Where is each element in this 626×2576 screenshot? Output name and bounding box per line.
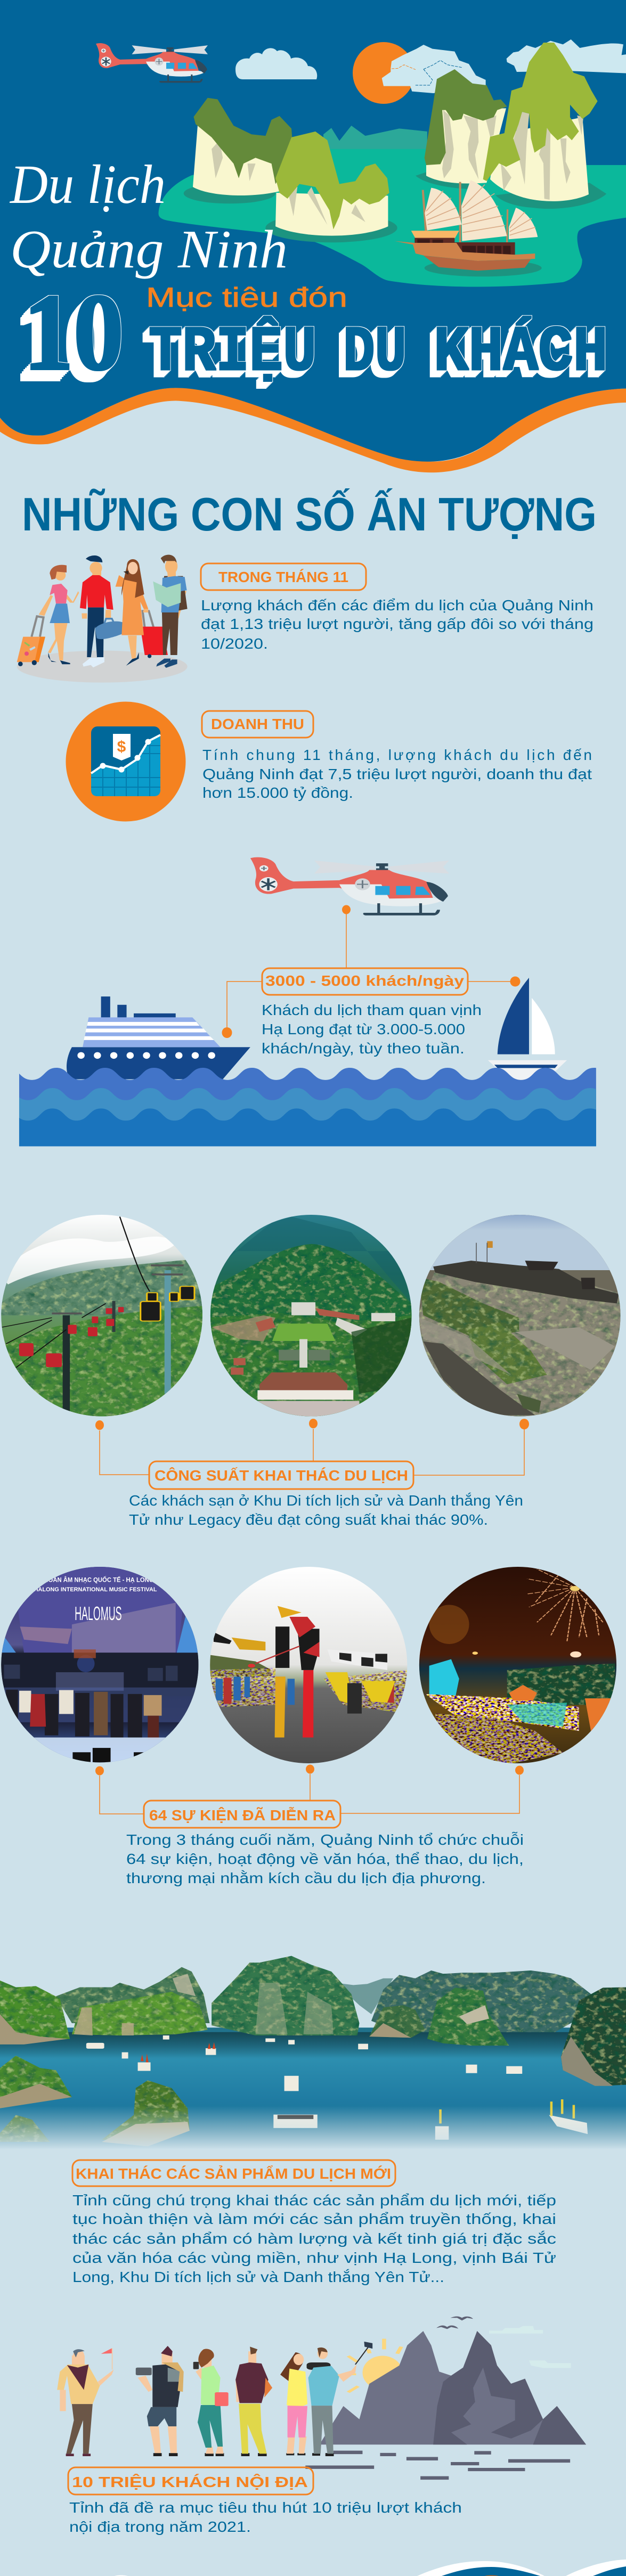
tag: khách/ngày: 3000 - 5000 khách/ngày (265, 972, 465, 989)
text: khách/ngày: Khách du lịch tham quan vịnh (262, 1002, 482, 1018)
tag: 64 sự kiện: 64 SỰ KIỆN ĐÃ DIỄN RA (149, 1807, 336, 1823)
clouds and sun overlap (382, 45, 486, 93)
title: triệu du khách: KHÁCH (434, 316, 608, 389)
photo: music festival: HOÀN ÂM NHẠC QUỐC TẾ - HẠ LONG (44, 1576, 154, 1583)
rocks right (395, 43, 606, 276)
text: sản phẩm mới: Tỉnh cũng chú trọng khai thác các sản phẩm du lịch mới, tiếp (72, 2192, 556, 2209)
text: sản phẩm mới: Long, Khu Di tích lịch sử và Danh thắng Yên Tử... (72, 2269, 444, 2285)
panel: transport scene (19, 857, 596, 1146)
back mountains (159, 98, 626, 287)
connectors (222, 905, 520, 1038)
text: công suất: Tử như Legacy đều đạt công suất khai thác 90%. (129, 1511, 488, 1528)
icon: helicopter (96, 43, 208, 83)
footer waves (115, 2559, 626, 2576)
photo: music festival: HALOMUS (75, 1603, 122, 1624)
people (57, 2342, 372, 2456)
fade (0, 2106, 626, 2150)
back cloud (507, 39, 626, 73)
tag: doanh thu (202, 711, 313, 738)
illustration: tourists and mountains (57, 2316, 586, 2480)
wave band (0, 0, 626, 496)
far mountains (335, 1978, 393, 2014)
photo: music festival: HALONG INTERNATIONAL MUSIC FESTIVAL (34, 1587, 157, 1593)
text: trong tháng 11: 10/2020. (201, 635, 268, 652)
sun (348, 2339, 402, 2392)
rock: centre light (265, 213, 397, 242)
photo: cable cars (0, 1213, 204, 1418)
tag: trong tháng 11: TRONG THÁNG 11 (218, 569, 348, 585)
text: doanh thu: Tính chung 11 tháng, lượng khách du lịch đến (202, 747, 592, 763)
icon: cruise ship (67, 996, 250, 1079)
text: 10 triệu khách (69, 2499, 462, 2535)
mountains (320, 2331, 586, 2444)
title: Du lịch Quảng Ninh (9, 154, 288, 280)
title: triệu du khách: TRIỆU (149, 316, 316, 389)
tag: công suất: CÔNG SUẤT KHAI THÁC DU LỊCH (155, 1467, 408, 1484)
text: công suất (129, 1492, 523, 1528)
text: trong tháng 11: đạt 1,13 triệu lượt người, tăng gấp đôi so với tháng (201, 616, 594, 632)
tag: công suất (149, 1461, 413, 1489)
tag: sản phẩm mới: KHAI THÁC CÁC SẢN PHẨM DU LỊCH MỚI (76, 2165, 391, 2182)
tag: 10 triệu khách: 10 TRIỆU KHÁCH NỘI ĐỊA (72, 2473, 308, 2490)
tag: trong tháng 11 (201, 563, 366, 590)
panel: hero header (0, 0, 626, 496)
sun (353, 42, 414, 104)
boats (86, 2035, 522, 2140)
text: sản phẩm mới (72, 2192, 556, 2285)
clouds (489, 2326, 571, 2368)
connectors (95, 1765, 524, 1814)
text: khách/ngày (262, 1002, 482, 1057)
tag: 64 sự kiện (144, 1801, 340, 1828)
sea island (159, 149, 626, 287)
text: công suất: Các khách sạn ở Khu Di tích lịch sử và Danh thắng Yên (129, 1492, 523, 1509)
panel: event photos (0, 1566, 623, 1886)
text: 64 sự kiện: Trong 3 tháng cuối năm, Quảng Ninh tổ chức chuỗi (126, 1831, 524, 1848)
photo: night festival (415, 1566, 623, 1763)
title: Du lịch Quảng Ninh: Quảng Ninh (10, 219, 288, 280)
subtitle: Mục tiêu đón (146, 282, 347, 313)
icon: revenue chart (66, 702, 185, 821)
text: trong tháng 11: Lượng khách đến các điểm du lịch của Quảng Ninh (201, 597, 594, 614)
rock: left dark (184, 183, 275, 203)
icon: revenue chart: $ (117, 738, 126, 756)
connectors (95, 1419, 529, 1475)
photo: yen tu peak (415, 1213, 623, 1418)
tag: 10 triệu khách (68, 2467, 313, 2495)
text: sản phẩm mới: tục hoàn thiện và làm mới các sản phẩm truyền thống, khai (72, 2211, 556, 2227)
photo: music festival (0, 1566, 200, 1763)
sea waves (19, 1068, 596, 1146)
cloud (235, 48, 317, 79)
text: khách/ngày: Hạ Long đạt từ 3.000-5.000 (262, 1021, 465, 1037)
photo: temple complex (208, 1213, 415, 1418)
text: sản phẩm mới: thác các sản phẩm có hàm lượng và kết tinh giá trị đặc sắc (72, 2230, 556, 2247)
birds (436, 2316, 473, 2329)
text: khách/ngày: khách/ngày, tùy theo tuần. (262, 1040, 465, 1057)
text: 64 sự kiện: 64 sự kiện, hoạt động về văn hóa, thể thao, du lịch, (126, 1851, 524, 1867)
icon: helicopter large (250, 857, 449, 915)
text: trong tháng 11 (201, 597, 594, 652)
title: triệu du khách: DU (343, 317, 407, 389)
icon: junk boat (395, 180, 542, 276)
panel: capacity photos (0, 1213, 623, 1528)
text: 64 sự kiện: thương mại nhằm kích cầu du lịch địa phương. (126, 1870, 486, 1886)
text: 64 sự kiện (126, 1831, 524, 1886)
text: 10 triệu khách: Tỉnh đã đề ra mục tiêu thu hút 10 triệu lượt khách (69, 2499, 462, 2516)
tag: sản phẩm mới (72, 2160, 395, 2186)
text: doanh thu: hơn 15.000 tỷ đồng. (202, 784, 353, 801)
photo: stilt parade (208, 1566, 411, 1763)
tag: doanh thu: DOANH THU (211, 716, 304, 732)
tag: khách/ngày (262, 968, 468, 995)
text: doanh thu (202, 747, 592, 801)
text: 10 triệu khách: nội địa trong năm 2021. (69, 2518, 251, 2535)
title number 10: 10 (23, 271, 124, 393)
title: triệu du khách (149, 316, 608, 389)
illustration: travellers (17, 555, 188, 683)
icon: sailboat (488, 978, 567, 1082)
text: sản phẩm mới: của văn hóa các vùng miền, như vịnh Hạ Long, vịnh Bái Tử (72, 2250, 556, 2266)
stepping stones (305, 2451, 570, 2480)
photo: ha long bay (0, 1956, 626, 2150)
text: doanh thu: Quảng Ninh đạt 7,5 triệu lượt người, doanh thu đạt (202, 766, 592, 782)
title: Du lịch Quảng Ninh: Du lịch (9, 154, 166, 215)
